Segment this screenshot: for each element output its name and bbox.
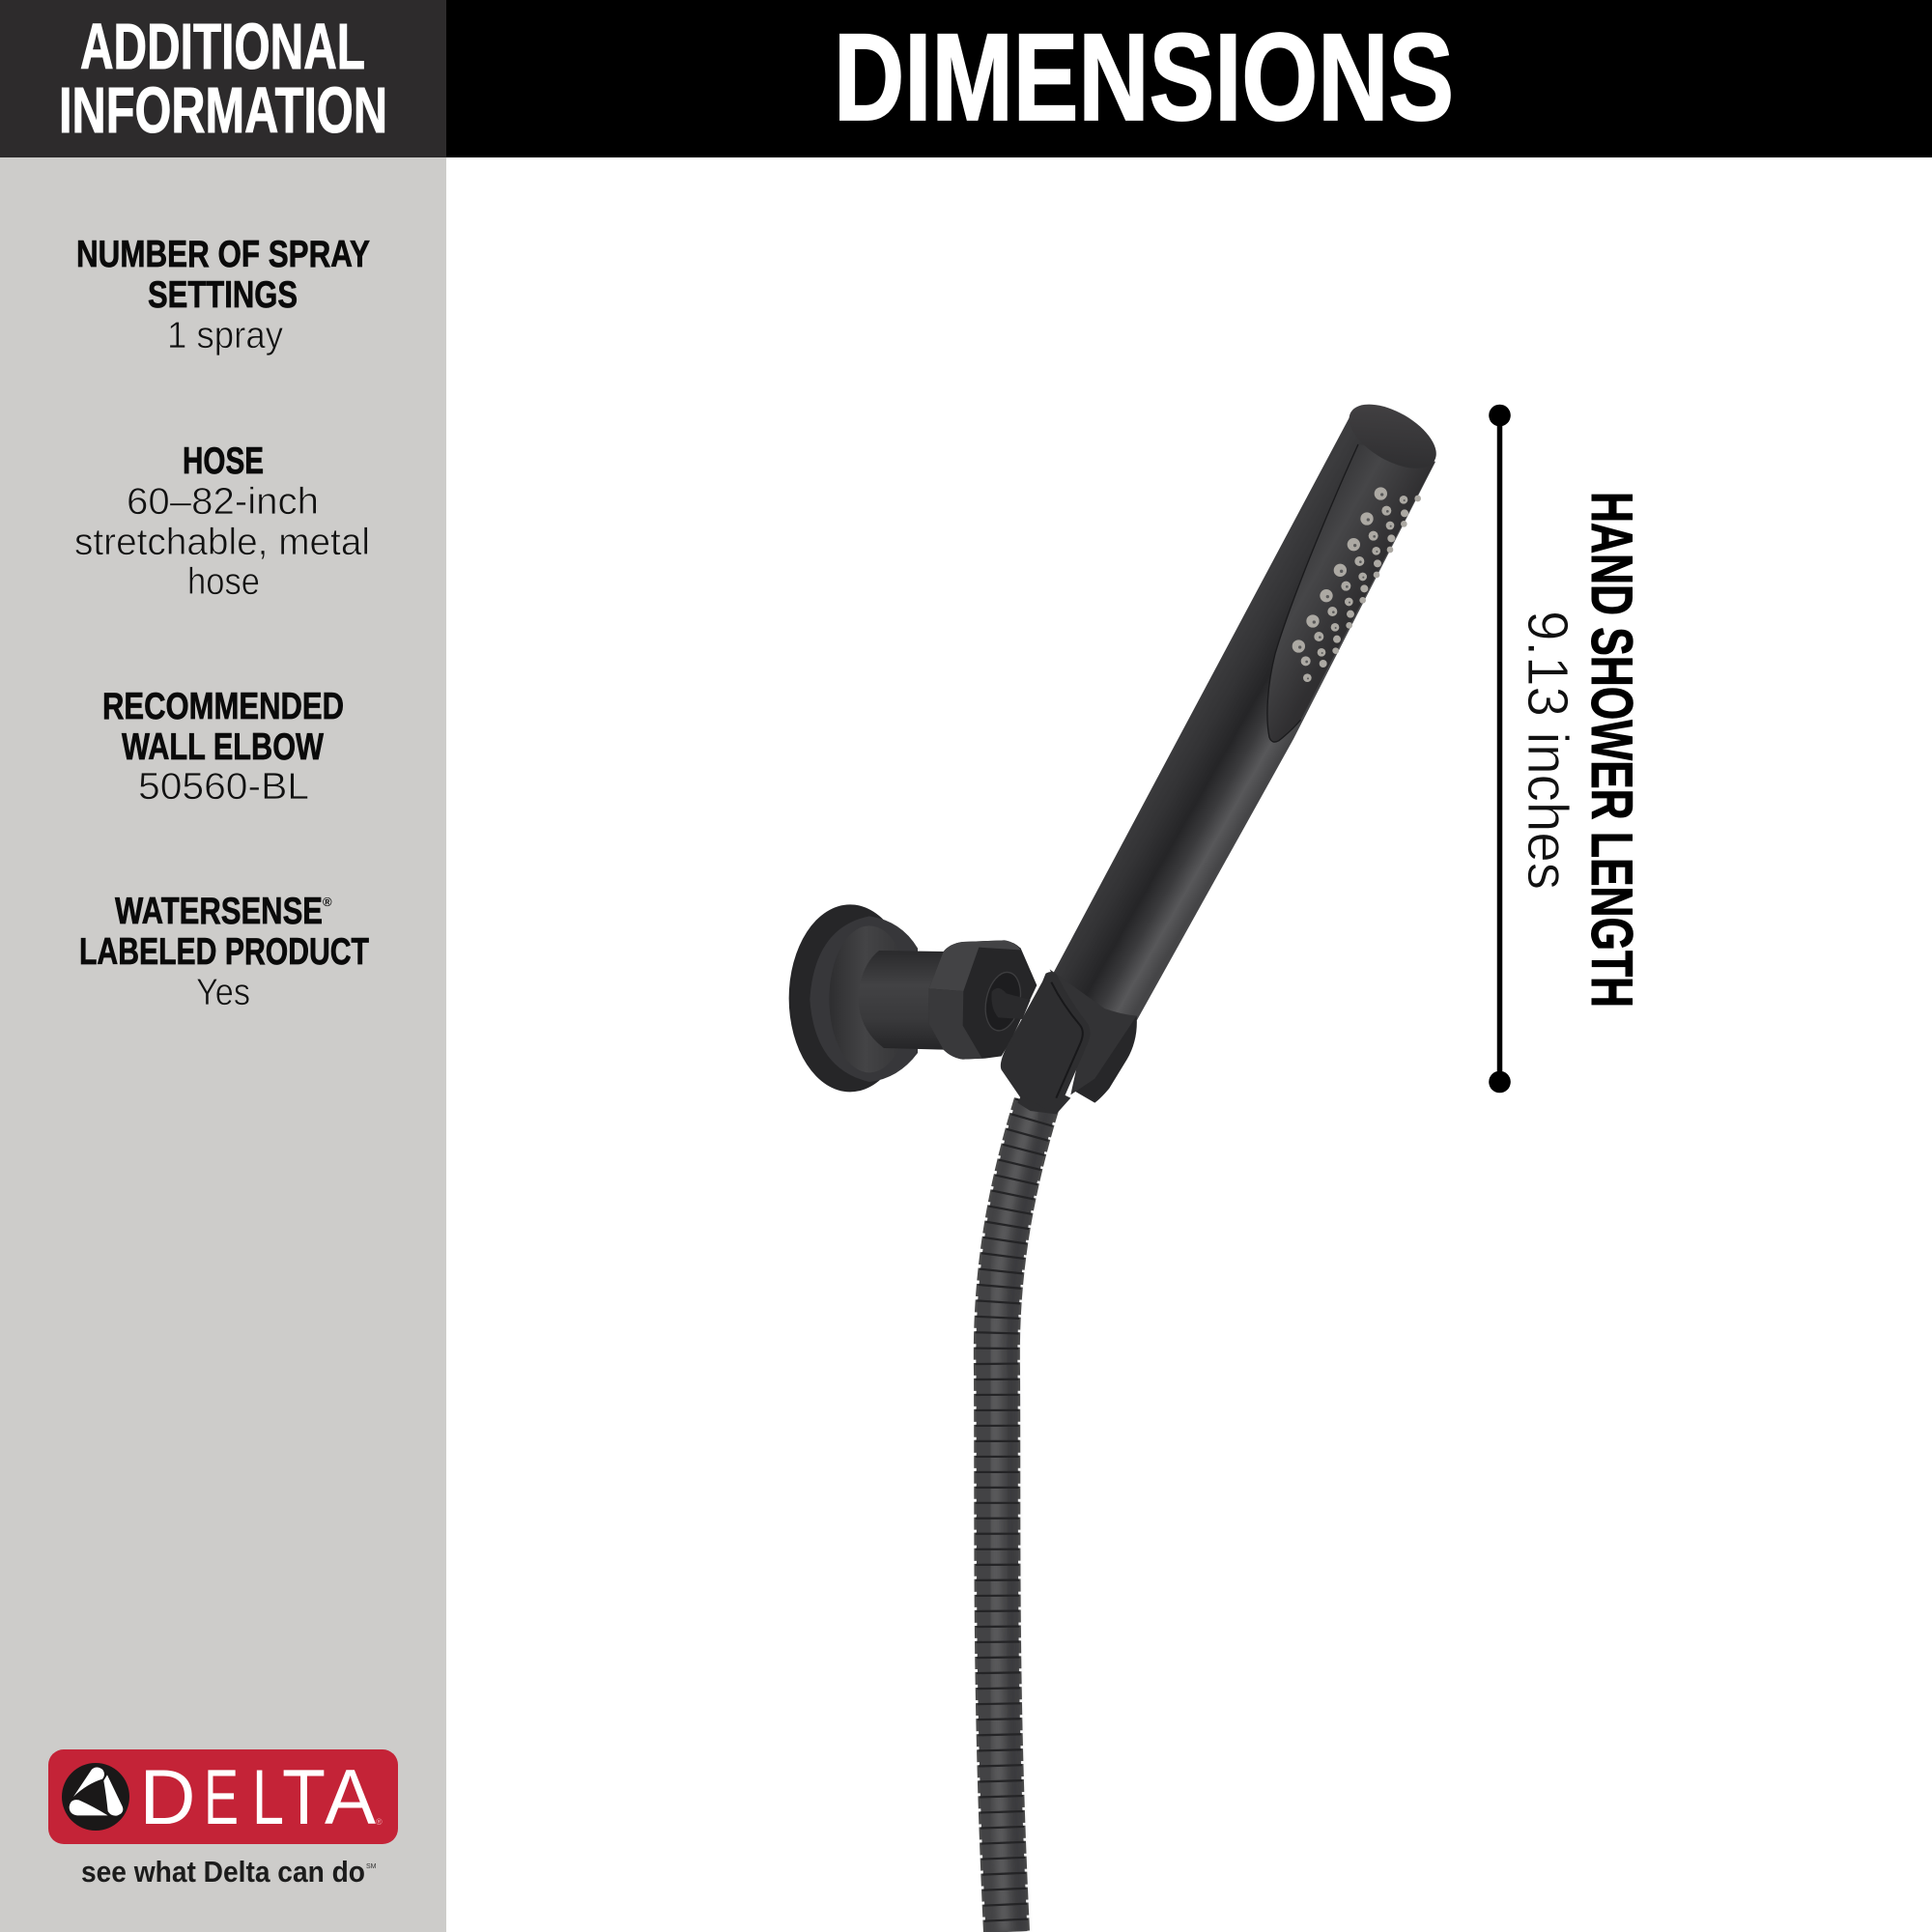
header: dimensions bar xyxy=(446,0,1932,157)
spec: hose: HOSE xyxy=(183,440,264,482)
nut side facet xyxy=(929,988,982,1060)
spec: watersense labeled product xyxy=(79,891,369,1013)
flange outer xyxy=(789,904,911,1092)
spec: watersense labeled product: ® xyxy=(323,895,332,909)
logo wordmark xyxy=(139,1754,376,1841)
dimension line: hand shower length xyxy=(1489,405,1511,1093)
pivot ring xyxy=(980,969,1026,1034)
spec: watersense labeled product: LABELED PRODUCT xyxy=(79,931,369,973)
spec: number of spray settings: NUMBER OF SPRAY xyxy=(76,234,370,275)
flange inner xyxy=(810,916,918,1082)
spec: watersense labeled product: WATERSENSE xyxy=(115,891,323,932)
panel: additional information sidebar xyxy=(0,0,446,1932)
spec: hose: hose xyxy=(187,561,260,603)
heading: additional information: INFORMATION xyxy=(59,74,387,147)
hose xyxy=(995,1104,1049,1932)
heading: additional information xyxy=(59,11,387,147)
nozzle centers xyxy=(1298,493,1406,679)
neck xyxy=(858,951,944,1050)
spec: recommended wall elbow xyxy=(102,686,344,808)
holder edge xyxy=(1051,982,1083,1098)
value: 9.13 inches: 9.13 inches xyxy=(1516,611,1579,890)
logo mark xyxy=(62,1763,129,1831)
spec: watersense labeled product: Yes xyxy=(196,972,250,1013)
holder back tab xyxy=(1075,1016,1137,1103)
spec: recommended wall elbow: WALL ELBOW xyxy=(122,726,324,768)
spray nozzles xyxy=(1293,487,1421,682)
spec: number of spray settings: 1 spray xyxy=(167,315,283,356)
spec: number of spray settings xyxy=(76,234,370,356)
handle body xyxy=(1053,415,1435,1020)
pivot stem xyxy=(991,988,1031,1019)
logo wordmark: A xyxy=(325,1754,376,1841)
holder front xyxy=(1002,973,1089,1109)
logo badge xyxy=(48,1749,398,1844)
spray face xyxy=(1267,444,1435,742)
spec: recommended wall elbow: 50560-BL xyxy=(138,766,309,808)
header: additional information bar xyxy=(0,0,446,157)
logo wordmark: L xyxy=(252,1754,284,1841)
spec: recommended wall elbow: RECOMMENDED xyxy=(102,686,344,727)
registered mark: ® xyxy=(376,1817,383,1827)
spray face seam xyxy=(1267,444,1358,742)
heading: additional information: ADDITIONAL xyxy=(80,11,365,83)
handle end cap xyxy=(1339,391,1447,481)
logo wordmark: D xyxy=(139,1754,195,1841)
hose connector xyxy=(1017,1094,1070,1114)
nut facets xyxy=(929,940,1021,991)
tagline: see what delta can do: SM xyxy=(366,1863,377,1870)
holder sleeve xyxy=(1050,969,1137,1094)
product photo: hand shower xyxy=(789,391,1447,1932)
title: dimensions: DIMENSIONS xyxy=(834,9,1454,147)
logo wordmark: T xyxy=(282,1754,326,1841)
wall mount xyxy=(789,904,1037,1092)
spec: hose: stretchable, metal xyxy=(74,522,370,563)
bell base xyxy=(829,925,910,1072)
spec: hose: 60–82-inch xyxy=(127,481,319,523)
holder clip xyxy=(1002,969,1137,1114)
spec: hose xyxy=(74,440,370,603)
label: hand shower length: HAND SHOWER LENGTH xyxy=(1579,492,1644,1008)
spec: number of spray settings: SETTINGS xyxy=(148,274,298,316)
logo: delta xyxy=(48,1749,398,1844)
tagline: see what delta can do: see what Delta can do xyxy=(81,1855,365,1889)
nut xyxy=(929,940,1037,1060)
logo wordmark: E xyxy=(204,1754,239,1841)
